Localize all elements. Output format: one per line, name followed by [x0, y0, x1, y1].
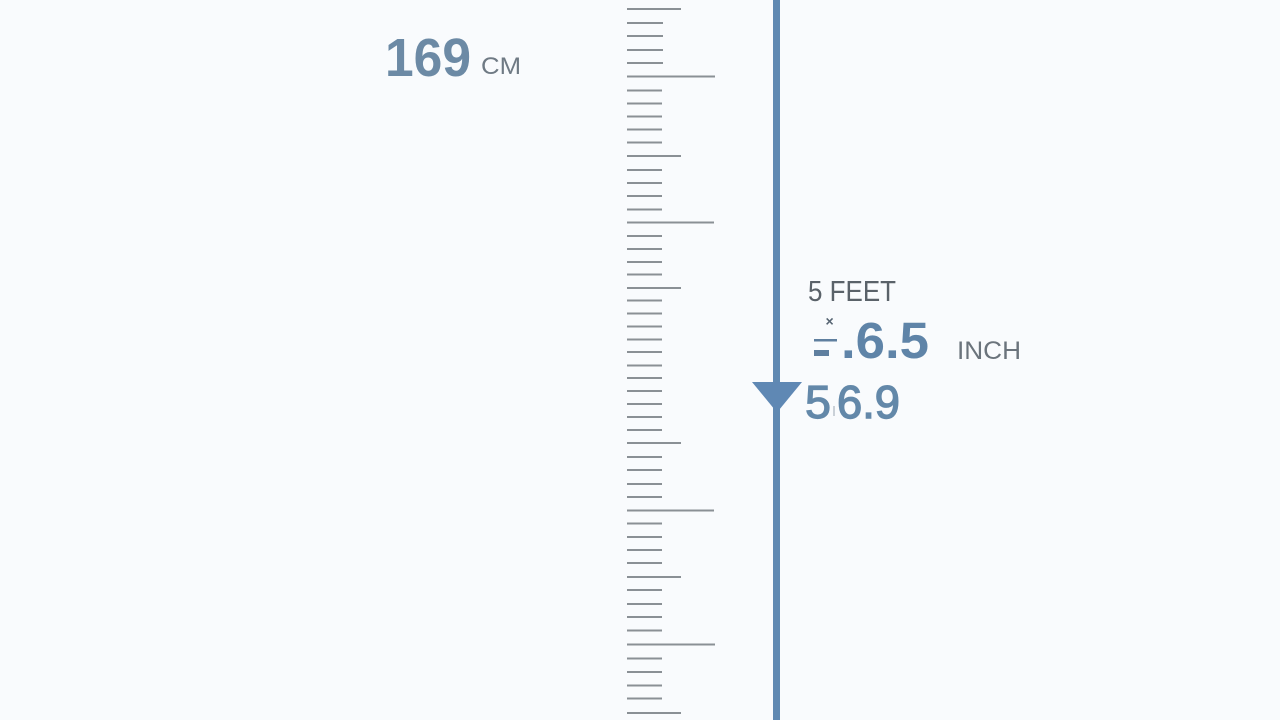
icon: multiply and equals glyph: ×	[826, 313, 834, 329]
decimal feet value	[805, 376, 900, 428]
ruler tick marks	[627, 9, 715, 713]
inches value: .6.5	[841, 312, 929, 369]
height marker arrow	[752, 382, 802, 410]
decimal feet value: 6.9	[837, 376, 900, 428]
centimetre value label: CM	[481, 53, 521, 80]
icon: multiply and equals glyph	[814, 313, 837, 356]
inch unit label: INCH	[957, 337, 1021, 365]
centimetre value label: 169	[385, 28, 471, 88]
feet label: 5 FEET	[808, 276, 896, 308]
decimal feet value: 5	[805, 376, 831, 428]
vertical height line	[773, 0, 780, 720]
centimetre value label	[385, 28, 521, 88]
